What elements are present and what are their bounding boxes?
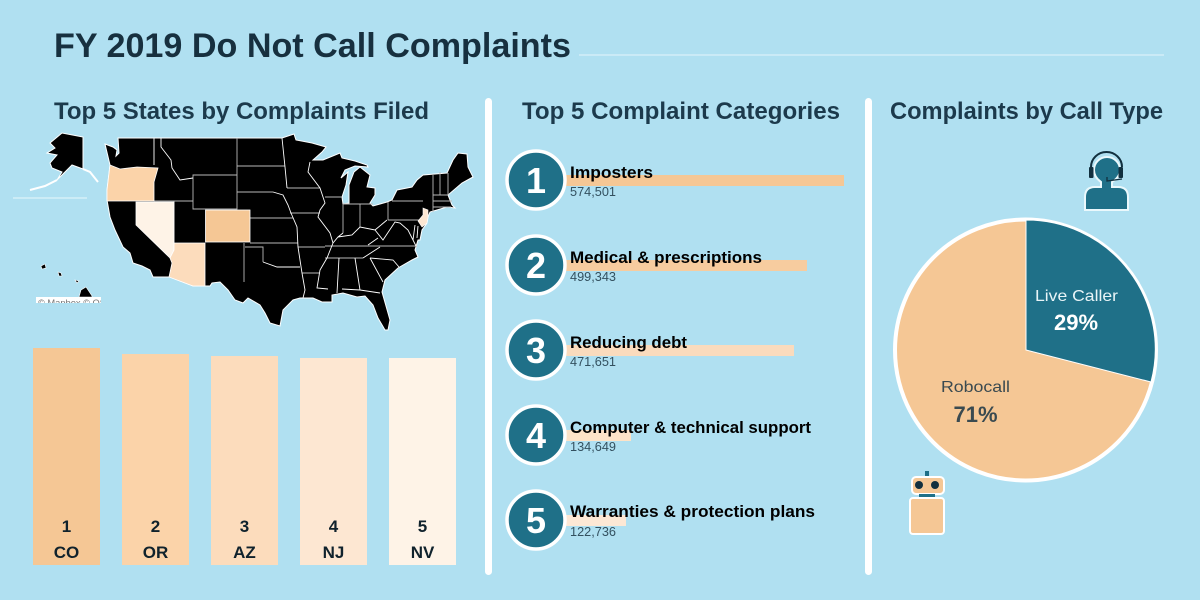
bar: AZ [211, 356, 278, 565]
map: Nevada [136, 202, 174, 258]
label: robocall [941, 379, 1010, 427]
category 3: Reducing debt: 3 [526, 330, 546, 371]
heading: call type: Complaints by Call Type [890, 98, 1163, 125]
map: Arizona [169, 243, 205, 286]
icon: live caller with headset [1085, 152, 1128, 210]
category 2: Medical & prescriptions: Medical & prescriptions [570, 248, 762, 267]
bar: NV: 5 [418, 517, 427, 536]
map: contiguous states [105, 134, 473, 330]
category 3: Reducing debt: Reducing debt [570, 333, 687, 352]
category 1: Imposters: 574,501 [570, 185, 616, 199]
bar: OR [122, 354, 189, 565]
category 5: Warranties & protection plans: Warranties & protection plans [570, 502, 815, 521]
bar: NV: NV [411, 543, 435, 562]
bar: NJ [300, 358, 367, 565]
category 4: Computer & technical support: 4 [526, 415, 546, 456]
category 4: Computer & technical support: 134,649 [570, 440, 616, 454]
map: Oregon [107, 165, 158, 201]
category 2: Medical & prescriptions: 499,343 [570, 270, 616, 284]
title: FY 2019 Do Not Call Complaints [54, 27, 571, 65]
category 4: Computer & technical support: Computer & technical support [570, 418, 811, 437]
label: robocall: Robocall [941, 379, 1010, 396]
category 5: Warranties & protection plans: 122,736 [570, 525, 616, 539]
category 3: Reducing debt [507, 321, 794, 379]
label: live caller [1035, 288, 1119, 335]
category 4: Computer & technical support [507, 406, 811, 464]
heading: categories: Top 5 Complaint Categories [522, 98, 840, 125]
category 1: Imposters [507, 151, 844, 209]
bar: OR: 2 [151, 517, 160, 536]
pie slice: live caller [1026, 220, 1155, 382]
pie chart: call type [895, 220, 1156, 480]
icon: robot [910, 471, 944, 534]
category 5: Warranties & protection plans: 5 [526, 500, 546, 541]
bar: AZ: 3 [240, 517, 249, 536]
map: Alaska [13, 133, 98, 198]
bar: CO: CO [54, 543, 79, 562]
category 5: Warranties & protection plans [507, 491, 815, 549]
bar: NJ: 4 [329, 517, 339, 536]
category 1: Imposters: 1 [526, 160, 546, 201]
category 2: Medical & prescriptions [507, 236, 807, 294]
label: live caller: 29% [1054, 310, 1098, 335]
category 3: Reducing debt: 471,651 [570, 355, 616, 369]
label: live caller: Live Caller [1035, 288, 1119, 305]
map attribution: © Mapbox © OSM [38, 298, 114, 308]
bar: CO [33, 348, 100, 565]
bar: CO: 1 [62, 517, 71, 536]
map: Hawaii [41, 264, 92, 297]
map: Colorado [206, 210, 250, 242]
bar: NJ: NJ [323, 543, 344, 562]
category 1: Imposters: Imposters [570, 163, 653, 182]
category 2: Medical & prescriptions: 2 [526, 245, 546, 286]
map of US states [13, 133, 473, 330]
bar: NV [389, 358, 456, 565]
bar: AZ: AZ [233, 543, 256, 562]
bar: OR: OR [143, 543, 168, 562]
map: New Jersey [418, 208, 428, 227]
map: straight state borders [154, 138, 452, 282]
label: robocall: 71% [953, 402, 998, 427]
heading: top states: Top 5 States by Complaints Filed [54, 98, 429, 125]
bar chart: top states [33, 348, 456, 565]
map: wiggly state borders [154, 138, 418, 298]
